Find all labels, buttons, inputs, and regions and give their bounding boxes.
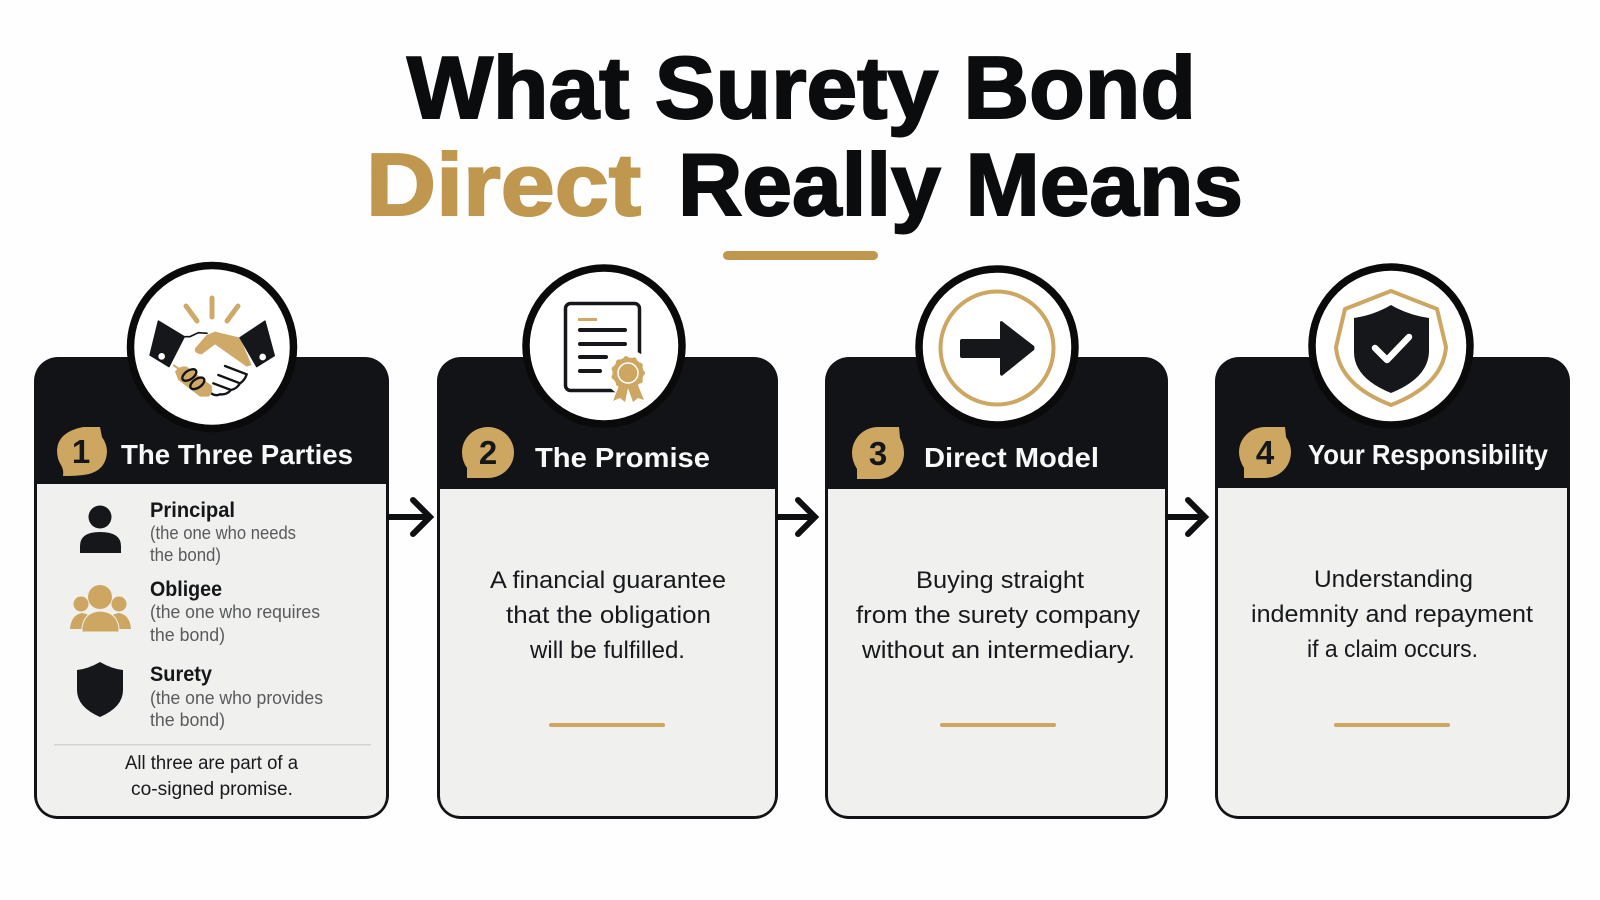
panel: your responsibility: [1215, 267, 1570, 819]
arrow: step 2 to 3: [778, 500, 815, 534]
text: principal: [150, 499, 296, 565]
heading: the promise: The Promise: [535, 442, 710, 473]
heading: your responsibility: Your Responsibility: [1308, 439, 1548, 470]
icon: certificate: [526, 268, 682, 424]
text: responsibility description: if a claim occurs.: [1307, 636, 1478, 663]
number badge 4: [1239, 427, 1291, 478]
arrow: step 3 to 4: [1168, 500, 1205, 534]
text: promise description: A financial guarantee: [490, 567, 726, 594]
number badge 2: [462, 427, 514, 478]
heading: direct model: Direct Model: [924, 442, 1099, 473]
text: co-signed note: All three are part of a: [125, 753, 298, 774]
text: direct model description: without an intermediary.: [861, 637, 1135, 664]
text: responsibility description: indemnity and repayment: [1251, 601, 1533, 628]
panel: direct model: [825, 269, 1168, 819]
icon: arrow in ring: [919, 269, 1075, 425]
card shell: [1215, 357, 1570, 819]
text: direct model description: from the surety company: [856, 602, 1141, 629]
text: surety: [150, 663, 323, 730]
card shell: [34, 357, 389, 819]
text: principal: the bond): [150, 545, 221, 565]
text: surety: Surety: [150, 663, 212, 686]
title: Direct: [366, 135, 641, 234]
icon: principal person: [80, 506, 121, 553]
text: surety: (the one who provides: [150, 688, 323, 708]
icon: surety shield: [77, 662, 123, 717]
text: promise description: that the obligation: [506, 602, 711, 629]
number badge 1: [57, 427, 107, 476]
text: surety: the bond): [150, 710, 225, 730]
card shell: [825, 357, 1168, 819]
number badge 4: 4: [1256, 434, 1275, 471]
title: [366, 38, 1243, 234]
title: What Surety Bond: [407, 38, 1196, 137]
text: principal: Principal: [150, 499, 235, 522]
number badge 3: 3: [869, 435, 887, 472]
text: direct model description: Buying straight: [916, 567, 1084, 594]
text: obligee: Obligee: [150, 578, 222, 601]
title: Really Means: [678, 135, 1243, 234]
text: direct model description: [856, 567, 1141, 664]
icon: shield check: [1312, 267, 1470, 425]
text: responsibility description: [1251, 566, 1533, 663]
card shell: [437, 357, 778, 819]
text: co-signed note: co-signed promise.: [131, 779, 293, 800]
icon: handshake: [130, 266, 294, 428]
title underline: [723, 251, 878, 260]
arrow: step 1 to 2: [389, 500, 430, 534]
text: obligee: the bond): [150, 625, 225, 645]
text: responsibility description: Understanding: [1314, 566, 1473, 593]
text: promise description: [490, 567, 726, 664]
heading: the three parties: The Three Parties: [121, 439, 353, 470]
icon: obligee group: [70, 585, 131, 632]
text: obligee: (the one who requires: [150, 602, 320, 622]
panel: the promise: [437, 268, 778, 819]
text: principal: (the one who needs: [150, 523, 296, 543]
number badge 1: 1: [72, 433, 90, 470]
panel: the three parties: [34, 266, 389, 819]
number badge 2: 2: [479, 434, 497, 471]
text: obligee: [150, 578, 320, 645]
text: promise description: will be fulfilled.: [529, 637, 685, 664]
text: co-signed note: [125, 753, 298, 800]
number badge 3: [852, 427, 904, 479]
